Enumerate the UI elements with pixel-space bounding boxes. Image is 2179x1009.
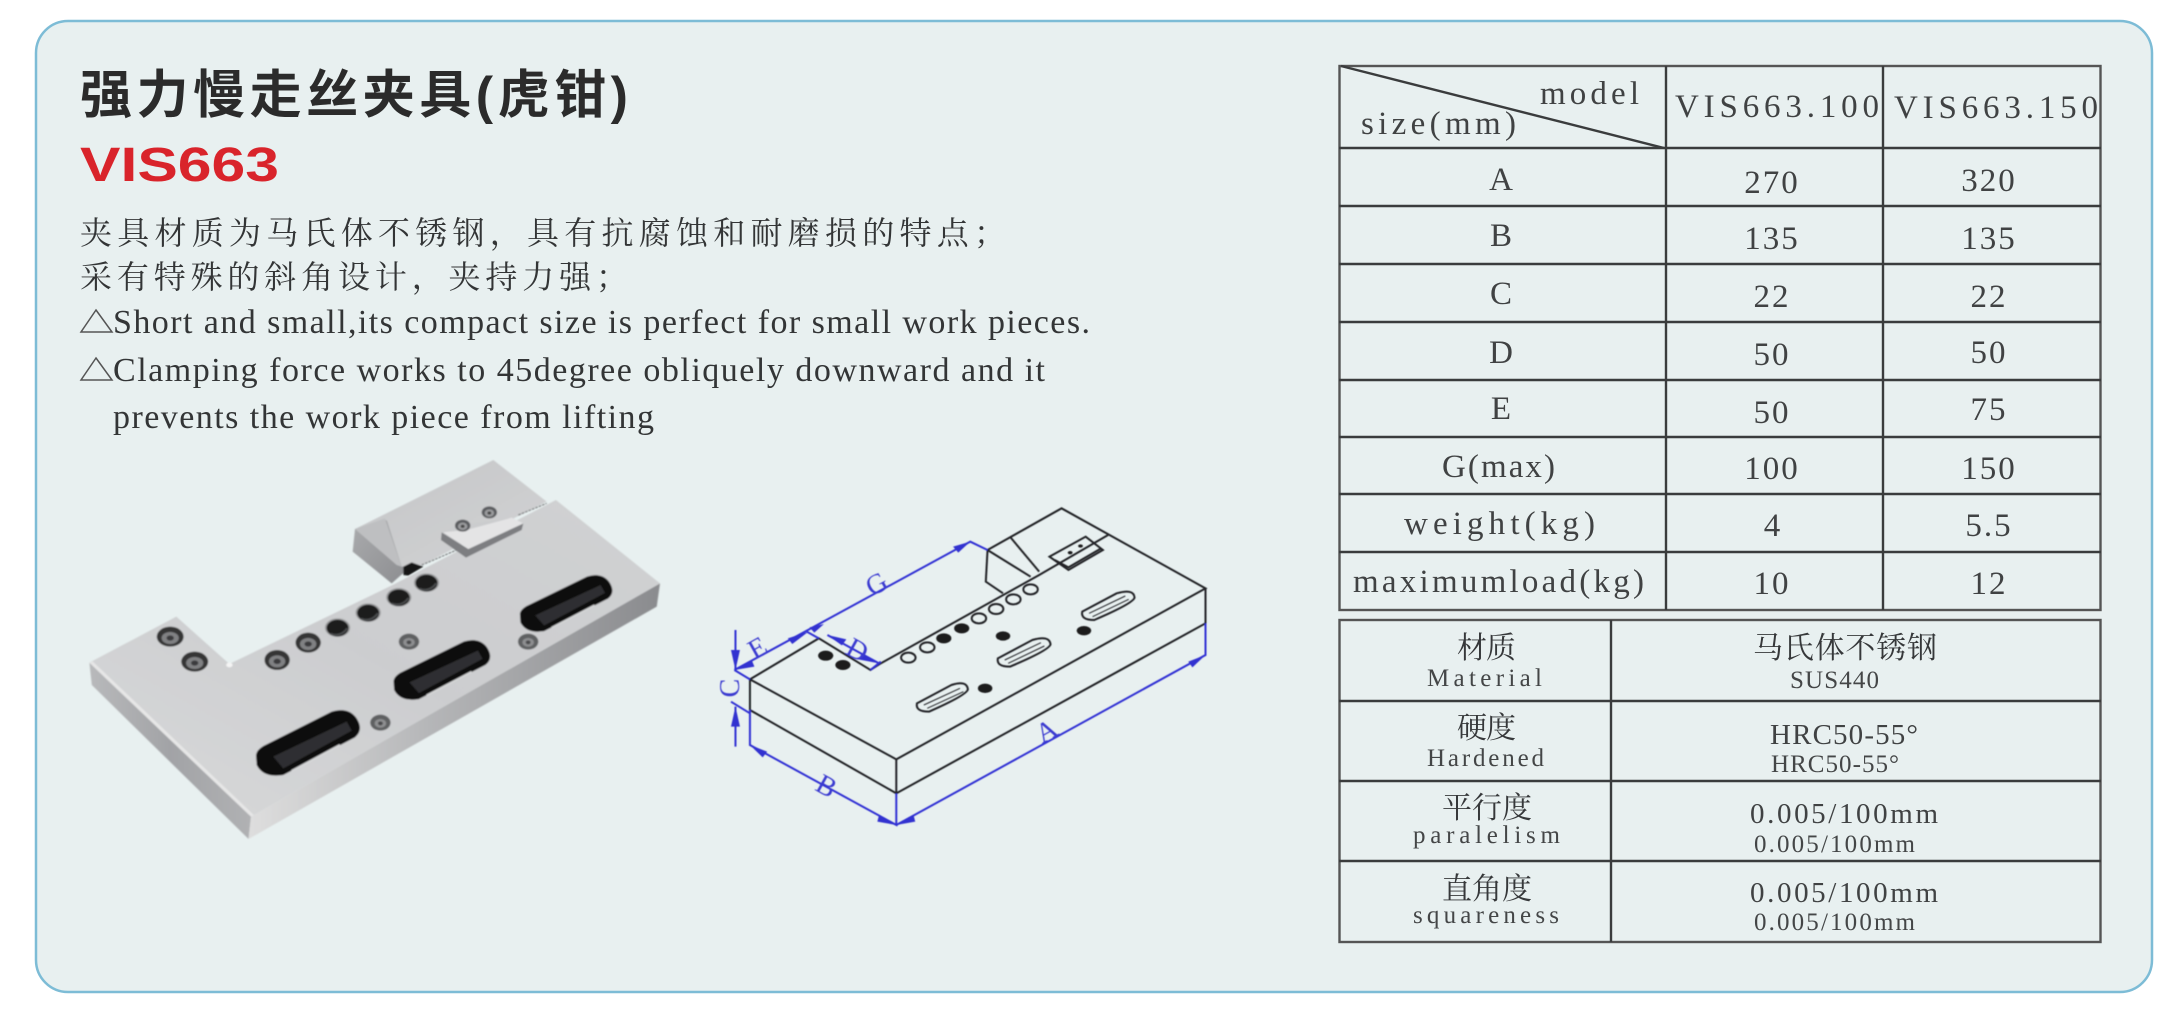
table header: VIS663.100 bbox=[1675, 89, 1879, 125]
slot 1 bbox=[256, 710, 360, 776]
text: English feature line 1: Short and small,its compact size is perfect for small work pieces. bbox=[113, 304, 1090, 341]
row squareness: 0.005/100mm bbox=[1754, 909, 1916, 936]
row C: 22 bbox=[1970, 279, 2008, 315]
text: English feature line 3: prevents the work piece from lifting bbox=[113, 399, 654, 436]
row maximum load: 10 bbox=[1754, 566, 1790, 602]
row weight bbox=[1404, 506, 2013, 544]
table header: model bbox=[1540, 76, 1639, 112]
row E: E bbox=[1491, 391, 1511, 427]
filled holes bbox=[818, 544, 1091, 693]
jaw screws bbox=[455, 520, 470, 532]
row B: 135 bbox=[1744, 221, 1800, 257]
row parallelism: 0.005/100mm bbox=[1754, 831, 1916, 858]
row squareness: 直角度 bbox=[1442, 873, 1532, 906]
clamp plate bbox=[441, 523, 523, 558]
text: Chinese feature line 1: 夹具材质为马氏体不锈钢，具有抗腐蚀和耐磨损的特点； bbox=[80, 215, 1006, 251]
slot 3 bbox=[520, 575, 612, 632]
row B bbox=[1490, 218, 2017, 257]
row squareness: squareness bbox=[1413, 902, 1559, 929]
row hardened: HRC50-55° bbox=[1770, 719, 1918, 751]
row A: 270 bbox=[1744, 165, 1800, 201]
row weight: 4 bbox=[1764, 508, 1780, 544]
jaw block top bbox=[355, 460, 547, 567]
dimension arrowheads bbox=[731, 542, 1206, 825]
socket screws bbox=[157, 627, 538, 731]
row C bbox=[1490, 276, 2008, 315]
jaw block side bbox=[353, 520, 405, 583]
slot 2 bbox=[394, 640, 490, 700]
circular holes bbox=[901, 653, 916, 663]
icon: triangle bullet 2 bbox=[81, 358, 112, 380]
row B: B bbox=[1490, 218, 1512, 254]
left side face bbox=[89, 663, 251, 839]
row material: Material bbox=[1427, 665, 1542, 692]
row E: 75 bbox=[1970, 392, 2008, 428]
long front side face bbox=[249, 583, 660, 839]
base top face bbox=[89, 500, 660, 817]
row maximum load: 12 bbox=[1970, 566, 2008, 602]
row C: 22 bbox=[1754, 279, 1790, 315]
row material bbox=[1427, 632, 1937, 694]
properties grid bbox=[1339, 620, 2101, 942]
icon: triangle bullet 1 bbox=[81, 310, 112, 332]
blue dimension lines bbox=[731, 542, 1206, 825]
row A: A bbox=[1489, 162, 1513, 198]
row hardened: 硬度 bbox=[1457, 712, 1516, 745]
row squareness: 0.005/100mm bbox=[1750, 877, 1938, 909]
text block: description bbox=[80, 215, 1090, 436]
row G(max) bbox=[1442, 449, 2017, 487]
row material: 材质 bbox=[1457, 632, 1516, 665]
row hardened: HRC50-55° bbox=[1771, 751, 1899, 778]
row hardened: Hardened bbox=[1427, 745, 1544, 772]
row A bbox=[1489, 162, 2017, 201]
dimension label D: D bbox=[841, 632, 873, 669]
product photo: wire-cut vise bbox=[89, 460, 660, 839]
table header: size(mm) bbox=[1361, 106, 1516, 142]
dimension drawing bbox=[715, 508, 1206, 825]
row of through holes bbox=[325, 573, 439, 637]
black outline bbox=[750, 508, 1206, 793]
row D: 50 bbox=[1970, 335, 2008, 371]
row weight: weight(kg) bbox=[1404, 506, 1595, 542]
row maximum load: maximumload(kg) bbox=[1353, 564, 1644, 600]
row D: D bbox=[1489, 335, 1513, 371]
row maximum load bbox=[1353, 564, 2008, 602]
row G(max): G(max) bbox=[1442, 449, 1555, 485]
text: English feature line 2: Clamping force works to 45degree obliquely downward and it bbox=[113, 352, 1046, 389]
table header: VIS663.150 bbox=[1894, 90, 2098, 126]
row G(max): 150 bbox=[1961, 451, 2017, 487]
row hardened bbox=[1427, 712, 1918, 778]
model code heading: VIS663 bbox=[80, 139, 279, 192]
row E bbox=[1491, 391, 2008, 431]
row D bbox=[1489, 335, 2008, 373]
dimension label E: E bbox=[743, 631, 773, 666]
row E: 50 bbox=[1754, 395, 1790, 431]
row parallelism: 0.005/100mm bbox=[1750, 798, 1938, 830]
row parallelism: 平行度 bbox=[1442, 792, 1532, 825]
table header bbox=[1361, 76, 2098, 142]
title: 强力慢走丝夹具(虎钳) bbox=[80, 67, 628, 125]
dimension label C: C bbox=[715, 679, 746, 697]
dimension label A: A bbox=[1031, 713, 1064, 750]
dimension label B: B bbox=[810, 768, 842, 805]
row C: C bbox=[1490, 276, 1512, 312]
row B: 135 bbox=[1961, 221, 2017, 257]
row weight: 5.5 bbox=[1965, 508, 2013, 544]
row D: 50 bbox=[1754, 337, 1790, 373]
row parallelism bbox=[1413, 792, 1938, 858]
row squareness bbox=[1413, 873, 1938, 936]
dimension label G: G bbox=[861, 566, 893, 603]
row G(max): 100 bbox=[1744, 451, 1800, 487]
properties table bbox=[1339, 620, 2101, 942]
text: Chinese feature line 2: 采有特殊的斜角设计，夹持力强； bbox=[80, 259, 628, 295]
row A: 320 bbox=[1961, 163, 2017, 199]
row material: SUS440 bbox=[1790, 667, 1879, 694]
size table bbox=[1339, 66, 2101, 610]
row material: 马氏体不锈钢 bbox=[1753, 632, 1937, 665]
table grid bbox=[1339, 66, 2101, 610]
slit and black notch bbox=[403, 562, 423, 576]
slots bbox=[917, 683, 968, 712]
row parallelism: paralelism bbox=[1413, 822, 1561, 849]
